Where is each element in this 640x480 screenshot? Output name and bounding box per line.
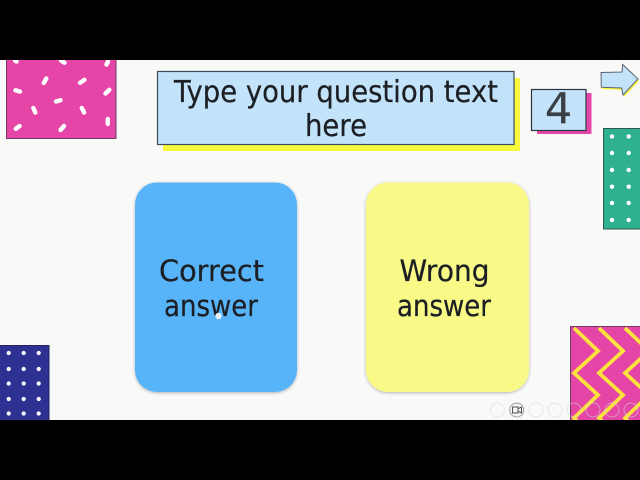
wrong answer text: Wrong (400, 254, 490, 288)
icon: mouse cursor (215, 313, 222, 319)
question box (158, 72, 520, 151)
wrong answer text: answer (397, 289, 491, 323)
icon: next arrow (601, 64, 639, 97)
slide background (0, 60, 640, 420)
icon: toolbar camera button (510, 403, 524, 417)
answer card: correct (135, 182, 297, 392)
panel: navy dotted tile (0, 346, 49, 420)
panel: pink sprinkles tile (6, 58, 116, 138)
panel: pink zigzag tile (570, 326, 640, 422)
correct answer text: answer (164, 289, 258, 323)
panel: green dotted tile (604, 128, 640, 229)
correct answer text: Correct (159, 254, 264, 288)
slideshow toolbar (490, 403, 638, 417)
question text: here (305, 109, 367, 144)
question text: Type your question text (173, 75, 498, 110)
question number badge (532, 84, 592, 134)
number: 4 (545, 84, 572, 134)
answer card: wrong (366, 182, 529, 392)
